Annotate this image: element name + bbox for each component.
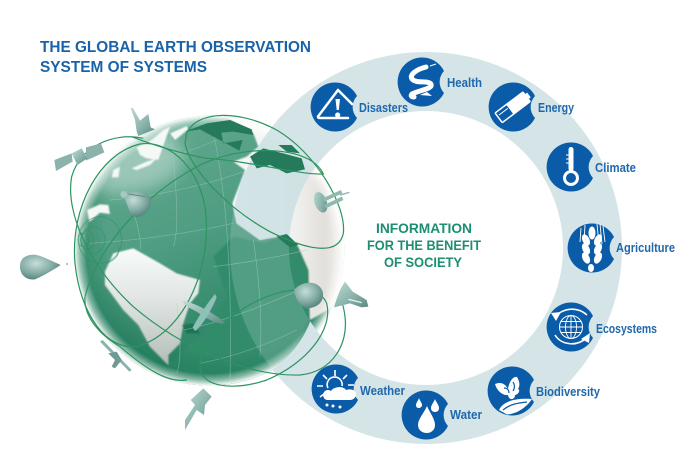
central message: FOR THE BENEFIT <box>367 238 482 253</box>
satellite: right tripod <box>334 282 368 307</box>
rim light <box>74 116 344 386</box>
south america <box>105 248 200 365</box>
label: water: Water <box>450 408 482 422</box>
satellite: upper left <box>54 143 104 171</box>
label: energy: Energy <box>538 101 574 115</box>
title: THE GLOBAL EARTH OBSERVATION <box>40 39 311 56</box>
label: disasters: Disasters <box>359 101 408 115</box>
satellite: centre spindle <box>183 294 225 331</box>
icon: health <box>398 58 444 106</box>
title: SYSTEM OF SYSTEMS <box>40 59 207 76</box>
icon: biodiversity <box>488 366 534 416</box>
orbit lines <box>71 115 345 386</box>
satellite: dish over north atlantic <box>120 191 151 217</box>
central message <box>367 221 482 270</box>
icon: agriculture <box>568 224 614 272</box>
ring seen through globe <box>230 130 318 368</box>
central message: OF SOCIETY <box>384 255 462 270</box>
weather balloon: left <box>20 255 68 280</box>
limb shading <box>76 186 318 386</box>
north america coast patches <box>87 126 188 222</box>
title <box>40 39 311 76</box>
label: weather: Weather <box>360 384 405 398</box>
label: climate: Climate <box>595 161 636 175</box>
balloon: lower right <box>294 283 323 308</box>
label: biodiversity: Biodiversity <box>536 385 600 399</box>
satellite: top <box>131 108 155 136</box>
label: agriculture: Agriculture <box>616 241 675 255</box>
icon: energy <box>489 82 535 132</box>
small island <box>182 323 200 333</box>
icon: water <box>402 390 448 440</box>
central message: INFORMATION <box>376 221 472 236</box>
label: health: Health <box>447 76 482 90</box>
darker african landmass <box>182 237 311 385</box>
europe dark land <box>185 120 305 247</box>
icon: ecosystems <box>547 302 593 352</box>
icon: climate <box>547 142 593 192</box>
icon: weather <box>312 364 358 414</box>
ring band <box>260 82 592 414</box>
icon: disasters <box>311 82 357 132</box>
earth sphere <box>57 116 350 387</box>
graticule <box>90 133 307 380</box>
pale north polar haze <box>92 127 190 203</box>
satellite: lower left <box>100 340 132 372</box>
satellite: east rim <box>311 190 349 214</box>
label: ecosystems: Ecosystems <box>596 322 657 336</box>
white glass zone <box>227 117 350 320</box>
satellite: bottom <box>185 388 212 430</box>
